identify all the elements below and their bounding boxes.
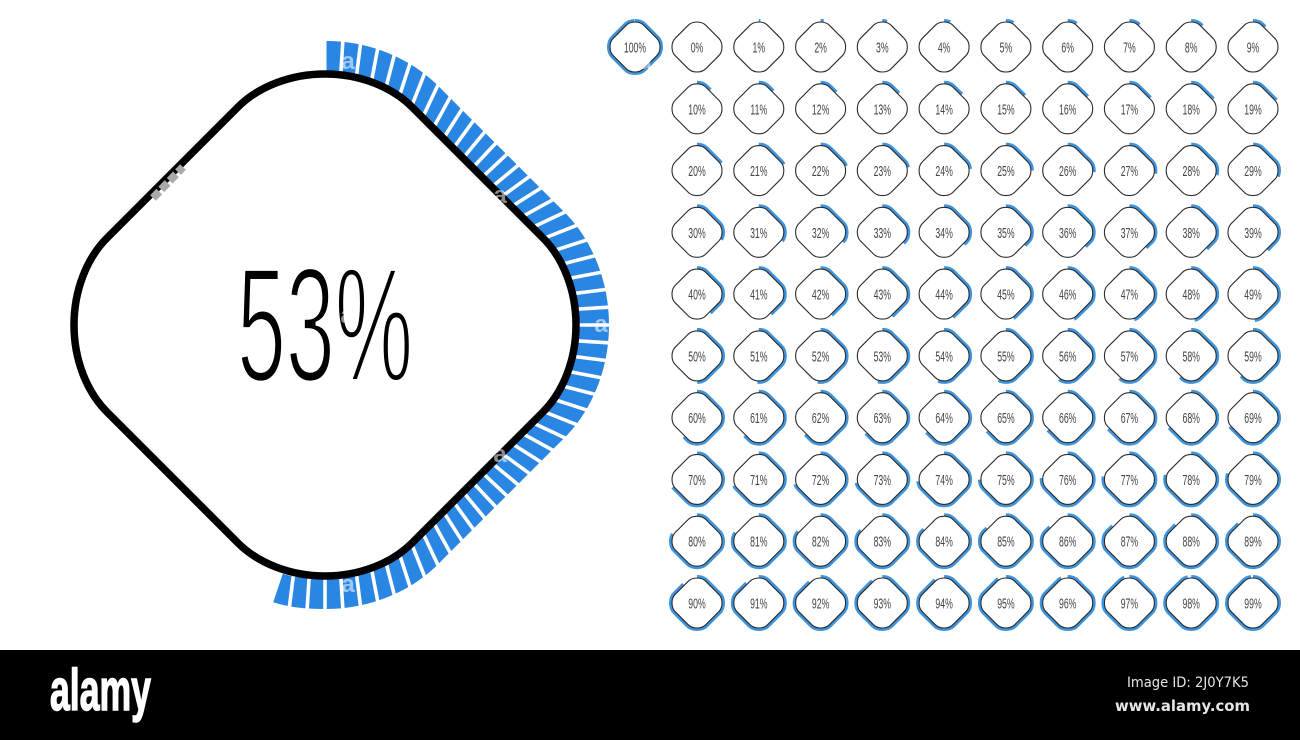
gauge 20%: 20% (688, 163, 706, 180)
gauge 22%: 22% (812, 163, 829, 180)
website address: www.alamy.com (1115, 697, 1250, 715)
gauge 38%: 38% (1182, 224, 1200, 241)
gauge 52% (794, 329, 847, 382)
gauge 83%: 83% (874, 533, 891, 550)
gauge 11%: 11% (750, 101, 767, 118)
gauge 16% (1041, 82, 1094, 135)
gauge 64% (918, 391, 971, 444)
gauge 4%: 4% (938, 39, 950, 56)
gauge 13%: 13% (874, 101, 891, 118)
gauge 41%: 41% (750, 286, 768, 303)
gauge 96%: 96% (1059, 595, 1076, 612)
gauge 46% (1041, 268, 1094, 321)
gauge 29%: 29% (1244, 163, 1262, 180)
gauge 9%: 9% (1247, 39, 1259, 56)
gauge 26% (1041, 144, 1094, 197)
gauge 35%: 35% (997, 224, 1015, 241)
gauge 29% (1226, 144, 1280, 197)
gauge 5% (979, 20, 1032, 74)
gauge 18% (1165, 82, 1218, 135)
gauge 35% (979, 206, 1032, 259)
gauge 78%: 78% (1182, 471, 1200, 489)
gauge 73%: 73% (874, 471, 891, 489)
gauge 70%: 70% (688, 471, 706, 489)
gauge 74%: 74% (935, 471, 953, 489)
gauge 97%: 97% (1121, 595, 1138, 612)
gauge 42%: 42% (812, 286, 829, 303)
gauge 57% (1103, 329, 1156, 382)
row 10 to 19 (670, 82, 1280, 135)
gauge 55% (979, 329, 1032, 382)
gauge 78% (1165, 453, 1218, 506)
gauge 17% (1103, 82, 1156, 135)
gauge 39%: 39% (1244, 224, 1262, 241)
gauge 89% (1226, 515, 1280, 568)
gauge 7%: 7% (1123, 39, 1136, 56)
gauge 2% (794, 20, 847, 74)
black rounded rhombus outline (74, 74, 576, 576)
gauge 58%: 58% (1182, 348, 1200, 365)
gauge 82%: 82% (812, 533, 829, 550)
gauge 6%: 6% (1061, 39, 1074, 56)
gauge 72% (794, 453, 847, 506)
gauge 55%: 55% (997, 348, 1015, 365)
gauge 65% (979, 391, 1032, 444)
ghost watermark marks: a (638, 48, 652, 75)
gauge 37% (1103, 206, 1156, 259)
gauge 50% (670, 329, 724, 382)
gauge 7% (1103, 20, 1156, 74)
gauge 43% (856, 268, 909, 321)
gauge 79% (1226, 453, 1280, 506)
gauge 77%: 77% (1121, 471, 1138, 489)
gauge 75% (979, 453, 1032, 506)
gauge 52%: 52% (812, 348, 829, 365)
gauge 1% (732, 20, 785, 74)
gauge 28% (1165, 144, 1218, 197)
gauge 49% (1226, 268, 1280, 321)
gauge 54% (918, 329, 971, 382)
gauge 31% (732, 206, 785, 259)
gauge 86% (1041, 515, 1094, 568)
gauge 86%: 86% (1059, 533, 1076, 550)
row 90 to 99 (670, 576, 1280, 630)
alamy logo wordmark: alamy (50, 658, 151, 723)
gauge 99% (1226, 576, 1280, 630)
gauge 80% (670, 515, 724, 568)
gauge 33% (856, 206, 909, 259)
gauge 18%: 18% (1182, 101, 1200, 118)
gauge 23%: 23% (874, 163, 891, 180)
gauge 4% (918, 20, 971, 74)
row 30 to 39 (670, 206, 1280, 259)
gauge 94%: 94% (935, 595, 953, 612)
gauge 1%: 1% (753, 39, 765, 56)
gauge 76% (1041, 453, 1094, 506)
gauge 9% (1226, 20, 1280, 74)
gauge 40%: 40% (688, 286, 706, 303)
gauge 36%: 36% (1059, 224, 1076, 241)
gauge 15% (979, 82, 1032, 135)
gauge 60% (670, 391, 724, 444)
gauge 60%: 60% (688, 410, 706, 427)
gauge 34% (918, 206, 971, 259)
gauge 100% (608, 20, 662, 74)
gauge 22% (794, 144, 847, 197)
gauge 68%: 68% (1182, 410, 1200, 427)
gauge 93% (856, 576, 909, 630)
gauge 88%: 88% (1182, 533, 1200, 550)
gauge 36% (1041, 206, 1094, 259)
gauge 56%: 56% (1059, 348, 1076, 365)
footer bar (0, 650, 1300, 740)
gauge 67%: 67% (1121, 410, 1138, 427)
gauge 45%: 45% (997, 286, 1015, 303)
gauge 12% (794, 82, 847, 135)
gauge 84% (918, 515, 971, 568)
segmented blue progress band (278, 26, 625, 625)
gauge 82% (794, 515, 847, 568)
gauge 94% (918, 576, 971, 630)
gauge 39% (1226, 206, 1280, 259)
gauge 21%: 21% (750, 163, 768, 180)
gauge 59%: 59% (1244, 348, 1262, 365)
gauge 100%: 100% (624, 39, 646, 56)
gauge 62% (794, 391, 847, 444)
gauge 53% (856, 329, 909, 382)
gauge 25%: 25% (997, 163, 1015, 180)
ghost watermark marks: a (341, 48, 355, 75)
gauge 5%: 5% (1000, 39, 1012, 56)
gauge 96% (1041, 576, 1094, 630)
gauge 49%: 49% (1244, 286, 1262, 303)
gauge 69% (1226, 391, 1280, 444)
gauge 63%: 63% (874, 410, 891, 427)
gauge 97% (1103, 576, 1156, 630)
gauge 0%: 0% (691, 39, 703, 56)
gauge 58% (1165, 329, 1218, 382)
row 50 to 59 (670, 329, 1280, 382)
gauge 91% (732, 576, 785, 630)
gauge 85% (979, 515, 1032, 568)
gauge 75%: 75% (997, 471, 1015, 489)
small gauge grid 0 to 99 (670, 20, 1280, 630)
gauge 70% (670, 453, 724, 506)
gauge 71%: 71% (750, 471, 768, 489)
gauge 64%: 64% (935, 410, 953, 427)
row 20 to 29 (670, 144, 1280, 197)
gauge 32%: 32% (812, 224, 829, 241)
gauge 3%: 3% (876, 39, 889, 56)
gauge 87%: 87% (1121, 533, 1138, 550)
gauge 79%: 79% (1244, 471, 1262, 489)
gauge 33%: 33% (874, 224, 891, 241)
gauge 48% (1165, 268, 1218, 321)
gauge 10% (670, 82, 724, 135)
gauge 30% (670, 206, 724, 259)
row 0 to 9 (672, 20, 1280, 74)
large 53% gauge (74, 26, 625, 625)
gauge 26%: 26% (1059, 163, 1076, 180)
gauge 80%: 80% (688, 533, 706, 550)
gauge 56% (1041, 329, 1094, 382)
gauge 16%: 16% (1059, 101, 1076, 118)
gauge 93%: 93% (874, 595, 891, 612)
gauge 42% (794, 268, 847, 321)
gauge 3% (856, 20, 909, 74)
gauge 74% (918, 453, 971, 506)
gauge 41% (732, 268, 785, 321)
row 40 to 49 (670, 268, 1280, 321)
gauge 65%: 65% (997, 410, 1015, 427)
gauge 34%: 34% (935, 224, 953, 241)
gauge 73% (856, 453, 909, 506)
gauge 46%: 46% (1059, 286, 1076, 303)
gauge 89%: 89% (1244, 533, 1262, 550)
row 80 to 89 (670, 515, 1280, 568)
ghost watermark marks: a (340, 302, 354, 329)
image id: Image ID: 2J0Y7K5 (1127, 675, 1249, 691)
gauge 59% (1226, 329, 1280, 382)
gauge 95% (979, 576, 1032, 630)
gauge 8% (1165, 20, 1218, 74)
gauge 47%: 47% (1121, 286, 1138, 303)
gauge 51% (732, 329, 785, 382)
gauge 61%: 61% (750, 410, 768, 427)
gauge 0% (672, 22, 722, 72)
gauge 57%: 57% (1121, 348, 1138, 365)
gauge 20% (670, 144, 724, 197)
gauge 19%: 19% (1244, 101, 1262, 118)
gauge 15%: 15% (997, 101, 1015, 118)
gauge 71% (732, 453, 785, 506)
gauge 67% (1103, 391, 1156, 444)
gauge 28%: 28% (1182, 163, 1200, 180)
gauge 21% (732, 144, 785, 197)
gauge 85%: 85% (997, 533, 1015, 550)
gauge 48%: 48% (1182, 286, 1200, 303)
gauge 14%: 14% (935, 101, 953, 118)
gauge 68% (1165, 391, 1218, 444)
gauge 25% (979, 144, 1032, 197)
gauge 38% (1165, 206, 1218, 259)
gauge 63% (856, 391, 909, 444)
ghost watermark marks: a (594, 311, 608, 338)
gauge 44%: 44% (935, 286, 953, 303)
gauge 50%: 50% (688, 348, 706, 365)
gauge 88% (1165, 515, 1218, 568)
ghost watermark marks (153, 48, 652, 598)
gauge 98%: 98% (1182, 595, 1200, 612)
gauge 43%: 43% (874, 286, 891, 303)
gauge 72%: 72% (812, 471, 829, 489)
gauge 92%: 92% (812, 595, 829, 612)
gauge 10%: 10% (688, 101, 706, 118)
gauge 61% (732, 391, 785, 444)
gauge 27%: 27% (1121, 163, 1138, 180)
gauge 84%: 84% (935, 533, 953, 550)
gauge 76%: 76% (1059, 471, 1076, 489)
gauge 77% (1103, 453, 1156, 506)
ghost watermark marks: a (493, 441, 507, 468)
gauge 51%: 51% (750, 348, 768, 365)
gauge 83% (856, 515, 909, 568)
gauge 92% (794, 576, 847, 630)
gauge 19% (1226, 82, 1280, 135)
gauge 81%: 81% (750, 533, 768, 550)
gauge 53%: 53% (874, 348, 891, 365)
gauge 66% (1041, 391, 1094, 444)
ghost watermark marks: a (493, 182, 507, 209)
gauge 90% (670, 576, 724, 630)
gauge 6% (1041, 20, 1094, 74)
gauge 24% (918, 144, 971, 197)
row 60 to 69 (670, 391, 1280, 444)
gauge 32% (794, 206, 847, 259)
gauge 11% (732, 82, 785, 135)
gauge 24%: 24% (935, 163, 953, 180)
row 70 to 79 (670, 453, 1280, 506)
gauge 98% (1165, 576, 1218, 630)
gauge 95%: 95% (997, 595, 1015, 612)
gauge 17%: 17% (1121, 101, 1138, 118)
gauge 12%: 12% (812, 101, 829, 118)
gauge 13% (856, 82, 909, 135)
gauge 44% (918, 268, 971, 321)
gauge 91%: 91% (750, 595, 768, 612)
gauge 2%: 2% (814, 39, 827, 56)
gauge 54%: 54% (935, 348, 953, 365)
gauge 14% (918, 82, 971, 135)
gauge 27% (1103, 144, 1156, 197)
gauge 62%: 62% (812, 410, 829, 427)
gauge 90%: 90% (688, 595, 706, 612)
gauge 23% (856, 144, 909, 197)
gauge 99%: 99% (1244, 595, 1262, 612)
ghost watermark marks: a (341, 571, 355, 598)
gauge 66%: 66% (1059, 410, 1076, 427)
gauge 69%: 69% (1244, 410, 1262, 427)
gauge 45% (979, 268, 1032, 321)
gauge 31%: 31% (750, 224, 768, 241)
large percentage value: 53% (237, 233, 413, 416)
gauge 30%: 30% (688, 224, 706, 241)
gauge 47% (1103, 268, 1156, 321)
gauge 87% (1103, 515, 1156, 568)
gauge 40% (670, 268, 724, 321)
gauge 81% (732, 515, 785, 568)
gauge 8%: 8% (1185, 39, 1198, 56)
gauge 37%: 37% (1121, 224, 1138, 241)
